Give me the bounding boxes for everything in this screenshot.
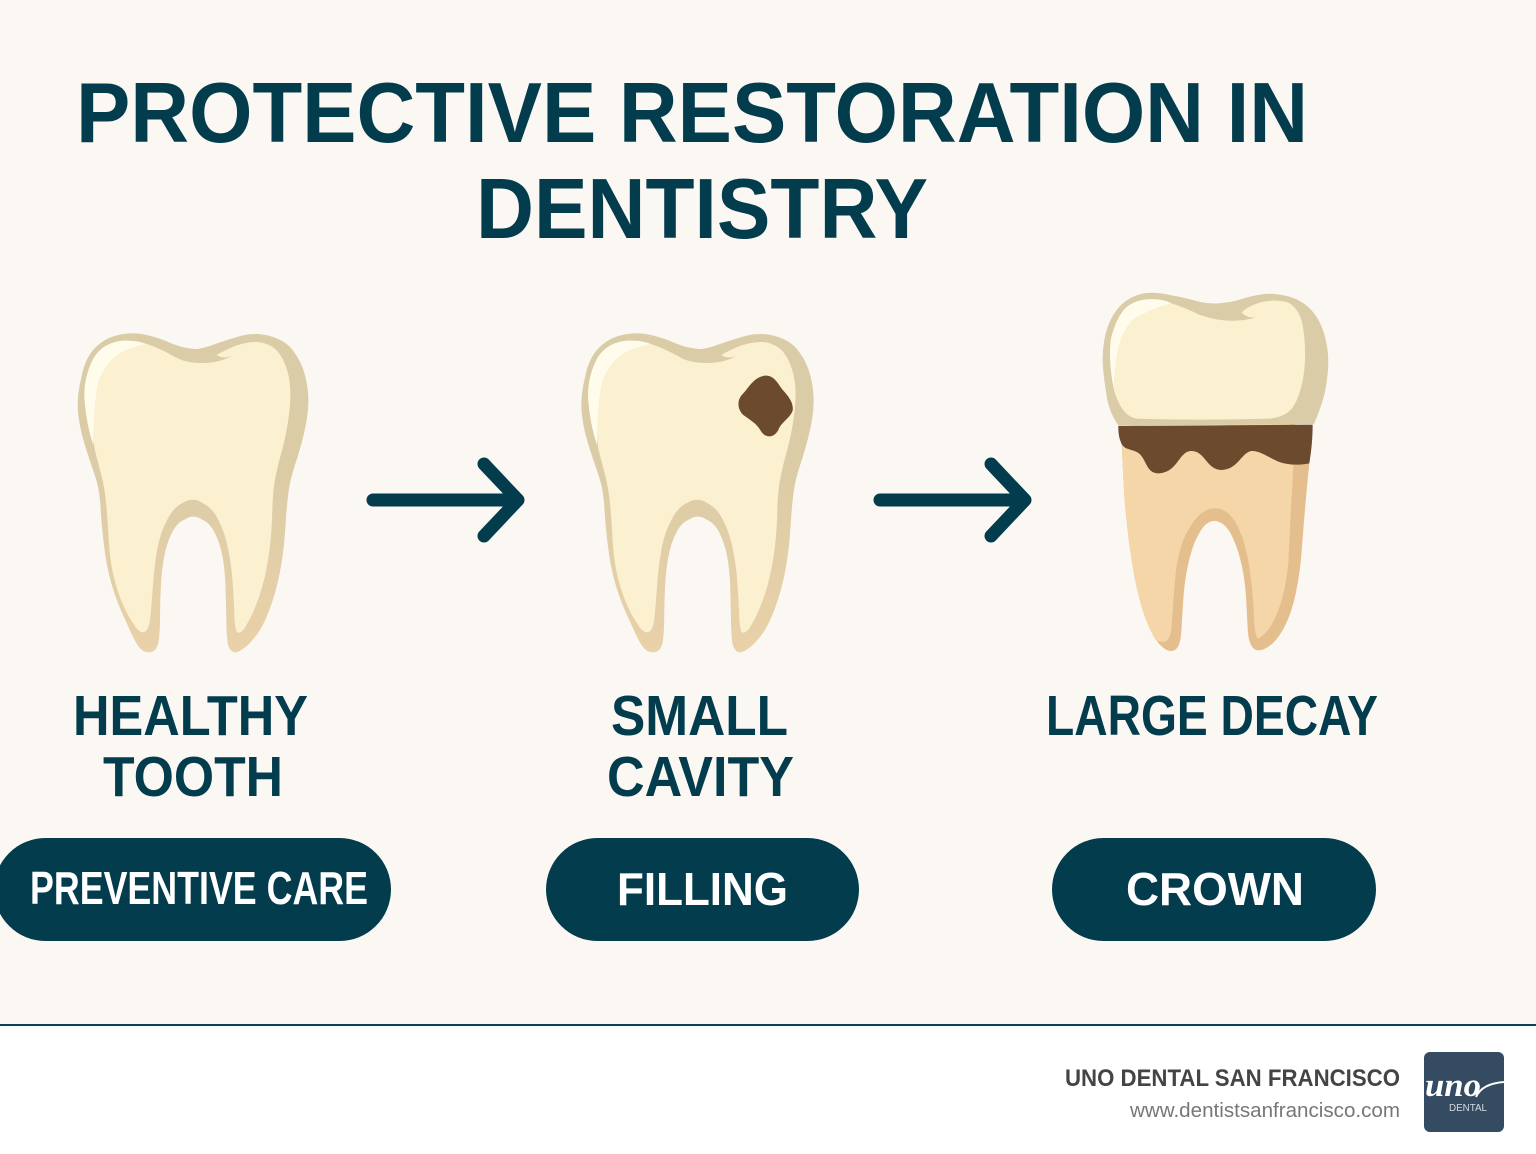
root shadow <box>1122 413 1310 651</box>
title: DENTISTRY <box>476 162 928 257</box>
cavity spot <box>738 376 793 436</box>
arrow: healthy to cavity <box>373 464 518 536</box>
pill: filling: FILLING <box>617 863 788 915</box>
pill: preventive care: PREVENTIVE CARE <box>30 862 368 914</box>
crown shell <box>1103 293 1328 426</box>
pill: preventive care <box>0 838 391 941</box>
title: PROTECTIVE RESTORATION IN <box>76 66 1308 161</box>
label: large decay: LARGE DECAY <box>1046 684 1378 748</box>
logo: uno dental: DENTAL <box>1449 1103 1487 1114</box>
footer website: www.dentistsanfrancisco.com <box>1129 1100 1400 1122</box>
icon: tooth with small cavity <box>581 333 814 652</box>
title <box>76 66 1308 257</box>
crown highlight <box>1110 299 1172 390</box>
label: small cavity: CAVITY <box>607 745 794 809</box>
label: small cavity: SMALL <box>611 684 788 748</box>
label: healthy tooth: HEALTHY <box>73 684 308 748</box>
pill: filling <box>546 838 859 941</box>
footer band <box>0 1024 1536 1154</box>
label: healthy tooth: TOOTH <box>103 745 283 809</box>
pill: crown <box>1052 838 1376 941</box>
icon: healthy tooth <box>78 333 308 652</box>
footer brand name: UNO DENTAL SAN FRANCISCO <box>1065 1065 1400 1092</box>
label: small cavity <box>607 684 794 809</box>
label: healthy tooth <box>73 684 308 809</box>
pill: crown: CROWN <box>1126 863 1304 915</box>
crown face <box>1114 300 1305 420</box>
logo: uno dental <box>1424 1052 1504 1132</box>
arrow: cavity to decay <box>880 464 1025 536</box>
logo: uno dental: uno <box>1425 1068 1481 1104</box>
decay band <box>1118 425 1313 473</box>
root body <box>1122 413 1293 642</box>
icon: tooth with large decay under crown <box>1103 293 1328 651</box>
